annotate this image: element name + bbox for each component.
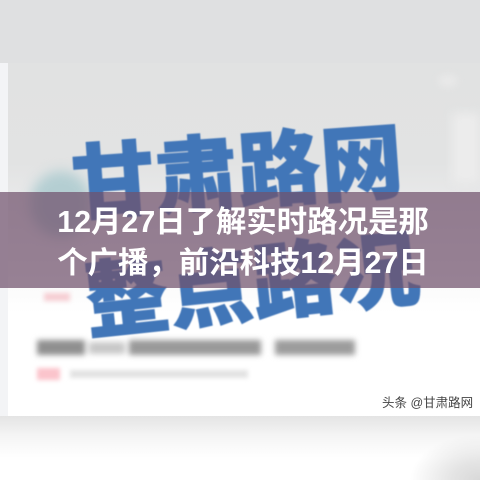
title segment 3 xyxy=(129,340,261,355)
blurred tag xyxy=(44,293,70,301)
title text xyxy=(57,205,429,280)
panel: screenshot card xyxy=(0,63,480,416)
blurred article title xyxy=(33,336,359,359)
left edge strip xyxy=(0,63,8,416)
heading: blue 整点路况: 整点路况 xyxy=(79,201,425,356)
background: grey corner shadow xyxy=(400,430,480,480)
blurred light patch right xyxy=(452,113,480,183)
heading: blue 甘肃路网: 甘肃路网 xyxy=(68,95,407,237)
watermark: 头条 @甘肃路网 xyxy=(382,396,473,410)
background: blurred bottom shadow xyxy=(0,416,480,480)
title band xyxy=(0,192,480,288)
title text: 个广播，前沿科技12月27日 xyxy=(57,246,429,280)
blurred meta line xyxy=(70,370,248,378)
title segment 1 xyxy=(37,340,85,355)
blurred light patch upper right xyxy=(438,75,458,87)
title segment 2 xyxy=(89,342,125,354)
background: blurred top strip xyxy=(0,0,480,63)
icon: blurred avatar xyxy=(30,171,92,237)
title segment 4 xyxy=(275,340,355,355)
blurred pink label xyxy=(37,368,60,380)
title text: 12月27日了解实时路况是那 xyxy=(57,205,429,239)
